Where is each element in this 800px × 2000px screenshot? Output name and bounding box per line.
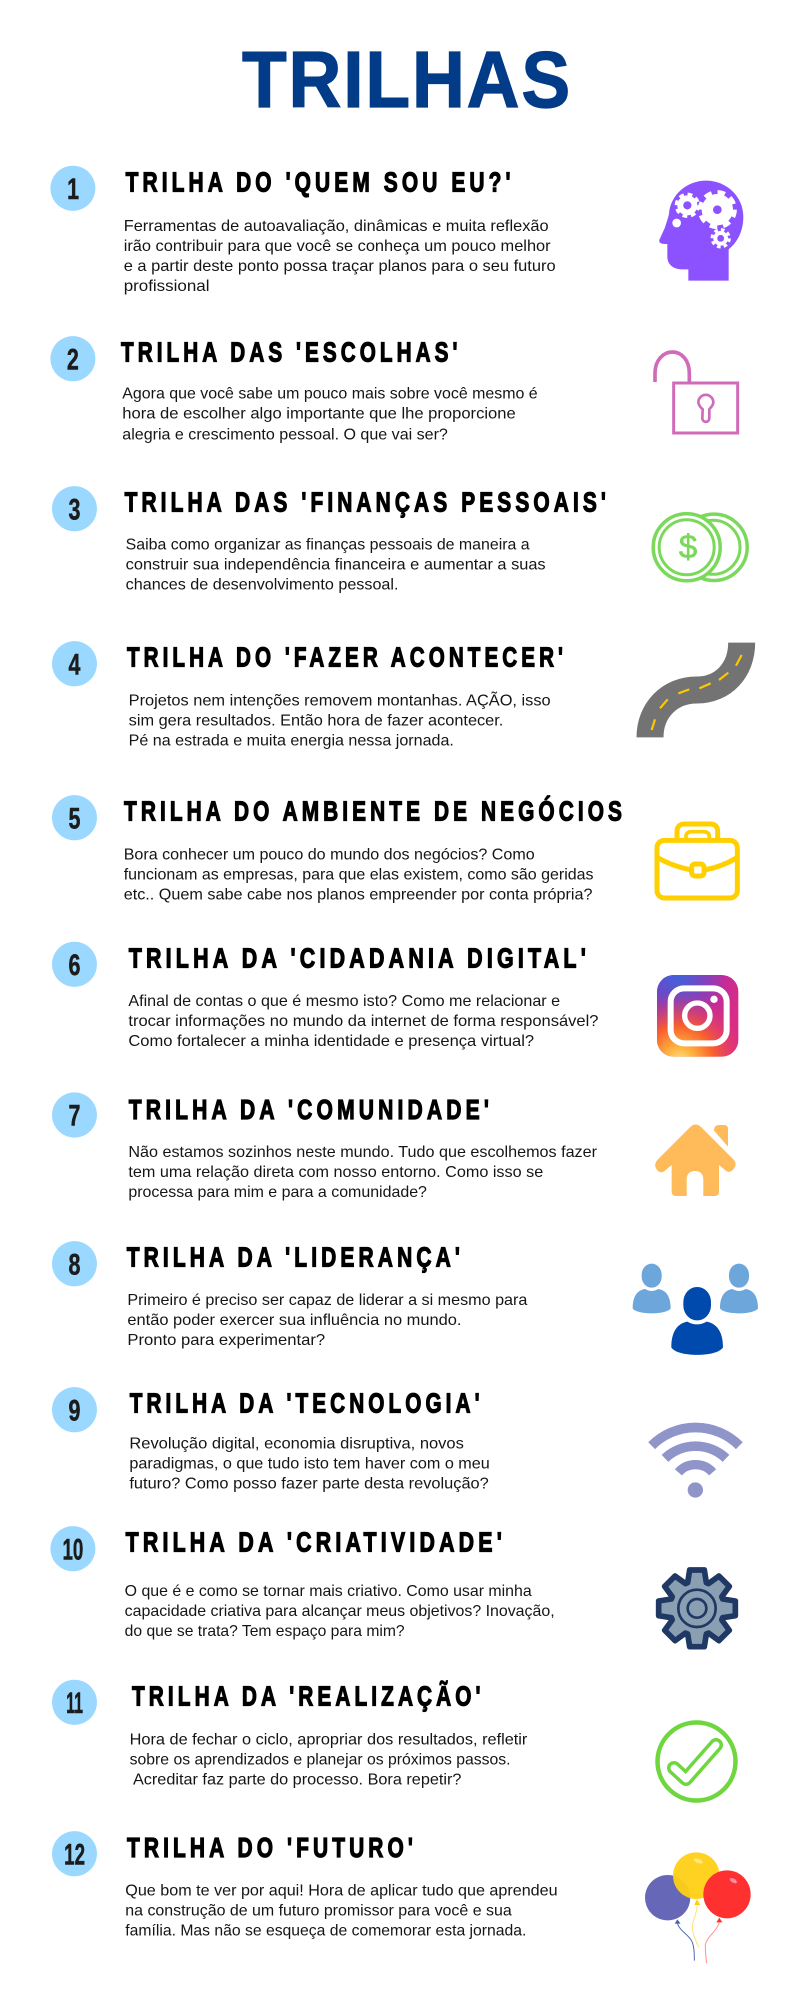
panel: trilha 12: [52, 1831, 751, 1963]
number badge 6: [52, 942, 97, 987]
body text 9: [129, 1435, 490, 1493]
number badge 12: [52, 1831, 97, 1876]
body text 4: Projetos nem intenções removem montanhas. AÇÃO, isso: [129, 689, 551, 710]
number badge 5: [52, 795, 97, 840]
body text 2: hora de escolher algo importante que lhe proporcione: [122, 405, 516, 423]
body text 4: Pé na estrada e muita energia nessa jornada.: [129, 732, 454, 750]
panel: trilha 6: [52, 942, 738, 1057]
icon: coins: $: [679, 528, 697, 565]
body text 9: Revolução digital, economia disruptiva, novos: [129, 1435, 464, 1453]
body text 11: Hora de fechar o ciclo, apropriar dos resultados, refletir: [130, 1731, 528, 1749]
body text 3: [126, 536, 546, 594]
heading 4: TRILHA DO 'FAZER ACONTECER': [127, 642, 567, 673]
body text 3: chances de desenvolvimento pessoal.: [126, 576, 399, 594]
body text 2: [122, 385, 538, 444]
number badge 11: [52, 1680, 97, 1725]
body text 4: sim gera resultados. Então hora de fazer acontecer.: [129, 712, 503, 730]
panel: trilha 5: [52, 795, 737, 904]
body text 8: [127, 1292, 527, 1349]
body text 12: Que bom te ver por aqui! Hora de aplicar tudo que aprendeu: [125, 1882, 558, 1900]
icon: briefcase: [657, 824, 737, 898]
body text 2: alegria e crescimento pessoal. O que vai ser?: [122, 426, 448, 444]
body text 10: capacidade criativa para alcançar meus objetivos? Inovação,: [125, 1603, 555, 1620]
body text 10: [125, 1583, 555, 1640]
icon: wifi: [652, 1428, 739, 1498]
body text 1: [124, 218, 556, 295]
body text 7: tem uma relação direta com nosso entorno. Como isso se: [128, 1164, 543, 1181]
body text 1: e a partir deste ponto possa traçar planos para o seu futuro: [124, 258, 556, 275]
number badge 1: [50, 166, 95, 211]
icon: house: [655, 1124, 736, 1196]
number badge 2: [50, 336, 95, 381]
body text 3: Saiba como organizar as finanças pessoais de maneira a: [126, 536, 530, 554]
body text 6: [128, 993, 599, 1050]
number badge 2: 2: [67, 343, 79, 376]
body text 1: irão contribuir para que você se conheça um pouco melhor: [124, 238, 551, 255]
heading 2: TRILHA DAS 'ESCOLHAS': [121, 337, 462, 368]
icon: people group: [633, 1264, 758, 1355]
heading 5: TRILHA DO AMBIENTE DE NEGÓCIOS: [124, 796, 626, 827]
number badge 3: [52, 486, 97, 531]
number badge 4: [52, 641, 97, 686]
number badge 1: 1: [67, 173, 79, 206]
panel: trilha 7: [52, 1092, 736, 1201]
body text 5: [124, 846, 594, 904]
body text 1: profissional: [124, 278, 209, 295]
heading 3: TRILHA DAS 'FINANÇAS PESSOAIS': [125, 487, 610, 518]
heading 6: TRILHA DA 'CIDADANIA DIGITAL': [129, 943, 590, 974]
icon: coins: [653, 514, 747, 581]
icon: balloons: [645, 1852, 751, 1963]
body text 12: [125, 1882, 558, 1940]
panel: trilha 11: [52, 1680, 735, 1800]
body text 10: do que se trata? Tem espaço para mim?: [125, 1623, 405, 1640]
body text 6: trocar informações no mundo da internet de forma responsável?: [128, 1013, 599, 1030]
body text 3: construir sua independência financeira e aumentar a suas: [126, 556, 546, 574]
number badge 6: 6: [69, 949, 80, 982]
heading 8: TRILHA DA 'LIDERANÇA': [127, 1242, 464, 1273]
body text 12: na construção de um futuro promissor para você e sua: [125, 1902, 512, 1920]
body text 2: Agora que você sabe um pouco mais sobre você mesmo é: [122, 385, 538, 403]
number badge 10: 10: [62, 1533, 83, 1566]
body text 11: [130, 1731, 528, 1789]
panel: trilha 4: [52, 641, 742, 750]
body text 7: Não estamos sozinhos neste mundo. Tudo que escolhemos fazer: [128, 1144, 598, 1161]
body text 7: [128, 1144, 598, 1201]
number badge 4: 4: [69, 648, 81, 681]
icon: head with gears: [659, 181, 743, 281]
body text 8: então poder exercer sua influência no mundo.: [127, 1312, 461, 1329]
number badge 7: 7: [69, 1100, 80, 1133]
icon: winding road: [650, 643, 742, 737]
body text 4: [129, 689, 551, 750]
body text 12: família. Mas não se esqueça de comemorar esta jornada.: [125, 1922, 526, 1940]
body text 8: Pronto para experimentar?: [127, 1332, 325, 1349]
icon: open padlock: [655, 352, 738, 433]
body text 9: futuro? Como posso fazer parte desta revolução?: [129, 1475, 489, 1493]
icon: instagram logo: [657, 975, 738, 1057]
panel: trilha 2: [50, 336, 738, 444]
number badge 9: 9: [69, 1394, 80, 1427]
panel: trilha 9: [52, 1387, 739, 1498]
heading 7: TRILHA DA 'COMUNIDADE': [129, 1094, 493, 1125]
body text 10: O que é e como se tornar mais criativo. Como usar minha: [125, 1583, 532, 1600]
heading 1: TRILHA DO 'QUEM SOU EU?': [126, 167, 515, 198]
number badge 9: [52, 1387, 97, 1432]
icon: check mark in circle: [658, 1722, 736, 1800]
heading 10: TRILHA DA 'CRIATIVIDADE': [126, 1527, 506, 1558]
number badge 5: 5: [69, 802, 80, 835]
number badge 11: 11: [66, 1687, 83, 1720]
title: TRILHAS: [242, 35, 572, 124]
body text 5: etc.. Quem sabe cabe nos planos empreender por conta própria?: [124, 886, 593, 904]
panel: trilha 3: [52, 486, 747, 594]
body text 7: processa para mim e para a comunidade?: [128, 1184, 427, 1201]
panel: trilha 1: [50, 166, 743, 295]
number badge 8: [52, 1241, 97, 1286]
body text 1: Ferramentas de autoavaliação, dinâmicas e muita reflexão: [124, 218, 549, 235]
panel: trilha 8: [52, 1241, 758, 1355]
heading 11: TRILHA DA 'REALIZAÇÃO': [132, 1681, 485, 1712]
body text 9: paradigmas, o que tudo isto tem haver com o meu: [129, 1455, 490, 1473]
icon: gear: [659, 1570, 735, 1647]
number badge 3: 3: [69, 493, 80, 526]
body text 5: funcionam as empresas, para que elas existem, como são geridas: [124, 866, 594, 884]
body text 11: Acreditar faz parte do processo. Bora repetir?: [133, 1771, 462, 1789]
body text 5: Bora conhecer um pouco do mundo dos negócios? Como: [124, 846, 535, 864]
body text 8: Primeiro é preciso ser capaz de liderar a si mesmo para: [127, 1292, 527, 1309]
body text 6: Como fortalecer a minha identidade e presença virtual?: [128, 1033, 534, 1050]
number badge 12: 12: [64, 1838, 85, 1871]
body text 11: sobre os aprendizados e planejar os próximos passos.: [130, 1751, 511, 1769]
heading 9: TRILHA DA 'TECNOLOGIA': [130, 1388, 484, 1419]
number badge 8: 8: [69, 1248, 80, 1281]
heading 12: TRILHA DO 'FUTURO': [127, 1832, 417, 1863]
body text 6: Afinal de contas o que é mesmo isto? Como me relacionar e: [128, 993, 560, 1010]
panel: trilha 10: [50, 1526, 735, 1647]
number badge 7: [52, 1092, 97, 1138]
number badge 10: [50, 1526, 95, 1571]
